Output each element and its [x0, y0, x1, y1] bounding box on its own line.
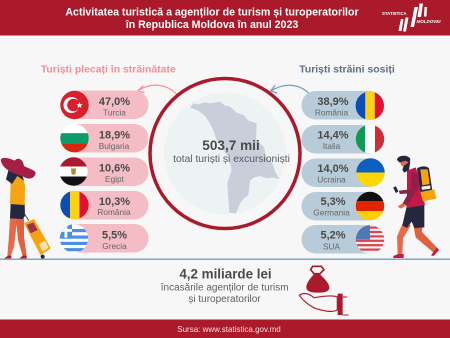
revenue label — [160, 282, 289, 305]
illustration: woman with suitcase — [1, 158, 51, 259]
revenue label: încasările agenților de turism — [160, 282, 289, 294]
row: Italia — [302, 124, 385, 154]
row: Grecia — [59, 224, 148, 254]
illustration: man with backpack — [393, 156, 439, 258]
icon: money bag on hand — [299, 266, 349, 315]
title: Activitatea turistică a agenților de turism și turoperatorilor — [65, 6, 359, 18]
arrow: to Moldova — [270, 85, 310, 94]
heading: foreign tourists: Turiști străini sosiți — [299, 64, 395, 76]
right column: origins — [302, 91, 386, 254]
row: Germania: 5,3% — [320, 196, 346, 208]
row: Italia: 14,4% — [317, 130, 349, 142]
row: Turcia: Turcia — [103, 108, 126, 118]
row: Turcia — [60, 90, 148, 120]
suitcase — [24, 214, 51, 259]
row: Bulgaria: 18,9% — [99, 129, 130, 141]
hair — [6, 167, 24, 184]
row: România: România — [315, 108, 348, 118]
row: SUA: 5,2% — [320, 230, 346, 242]
source: Sursa: www.statistica.gov.md — [177, 325, 281, 334]
row: Grecia: 5,5% — [102, 229, 127, 241]
arrow: to abroad — [138, 85, 176, 94]
row: Ucraina — [302, 158, 386, 188]
heading: tourists abroad: Turiști plecați în străinătate — [41, 64, 176, 76]
row: SUA: SUA — [323, 242, 340, 252]
back leg — [397, 224, 411, 255]
row: Egipt — [58, 156, 148, 186]
left column: destinations — [58, 90, 148, 254]
footer band — [0, 320, 450, 338]
row: Bulgaria — [60, 123, 148, 153]
row: Germania — [302, 191, 385, 221]
shoes — [393, 247, 439, 258]
row: SUA — [302, 224, 385, 254]
row: Germania: Germania — [313, 208, 350, 218]
hat — [1, 158, 36, 179]
row: Turcia: 47,0% — [99, 96, 130, 108]
map of Moldova — [190, 102, 279, 213]
top — [10, 175, 25, 205]
row: România: 10,3% — [99, 196, 130, 208]
total value: 503,7 mii — [202, 138, 260, 153]
central circle — [150, 78, 300, 228]
row: Ucraina: 14,0% — [317, 163, 349, 175]
row: Egipt: 10,6% — [99, 162, 130, 174]
row: Bulgaria: Bulgaria — [99, 141, 130, 151]
shorts — [10, 203, 25, 219]
row: Grecia: Grecia — [102, 241, 127, 251]
row: Egipt: Egipt — [105, 174, 125, 184]
front leg — [413, 225, 438, 253]
arm — [402, 172, 419, 206]
title: în Republica Moldova în anul 2023 — [125, 19, 298, 31]
row: România: România — [97, 207, 131, 217]
row: România: 38,9% — [317, 96, 349, 108]
ground line — [0, 258, 450, 260]
logo: Statistica Moldovei — [382, 4, 441, 32]
row: Ucraina: Ucraina — [317, 174, 346, 184]
phone — [393, 186, 398, 193]
row: România — [60, 190, 148, 220]
shorts — [402, 204, 424, 228]
row: România — [302, 91, 385, 121]
title — [65, 6, 359, 31]
legs — [7, 218, 17, 256]
logo: Statistica Moldovei: MOLDOVEI — [416, 19, 441, 24]
revenue value: 4,2 miliarde lei — [179, 266, 272, 282]
logo: Statistica Moldovei: STATISTICA — [382, 11, 407, 16]
row: Italia: Italia — [323, 141, 341, 151]
header band — [0, 0, 450, 36]
torso — [407, 167, 425, 208]
total label: total turiști și excursioniști — [173, 154, 290, 165]
revenue label: și turoperatorilor — [188, 294, 261, 305]
backpack — [417, 166, 436, 201]
head — [400, 158, 410, 167]
